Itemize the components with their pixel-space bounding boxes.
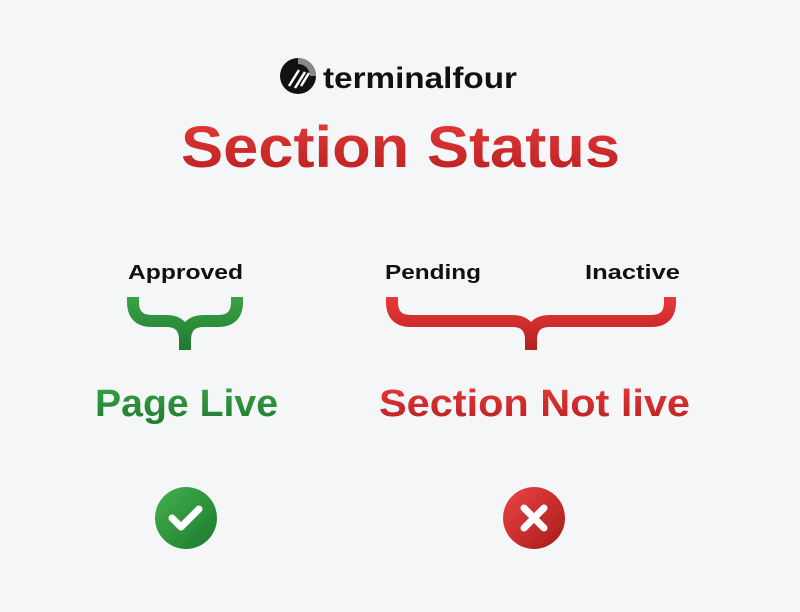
icon: check (155, 487, 217, 549)
label: Pending: Pending (385, 262, 481, 284)
logo (280, 58, 517, 95)
label: Inactive: Inactive (585, 262, 680, 284)
brace: red (392, 297, 670, 350)
brace: green (133, 297, 237, 350)
heading: Section Not live: Section Not live (379, 383, 690, 425)
title: Section Status (181, 115, 620, 180)
label: Approved: Approved (128, 262, 243, 284)
icon: cross (503, 487, 565, 549)
heading: Page Live: Page Live (95, 383, 278, 425)
logo: terminalfour (323, 62, 517, 95)
